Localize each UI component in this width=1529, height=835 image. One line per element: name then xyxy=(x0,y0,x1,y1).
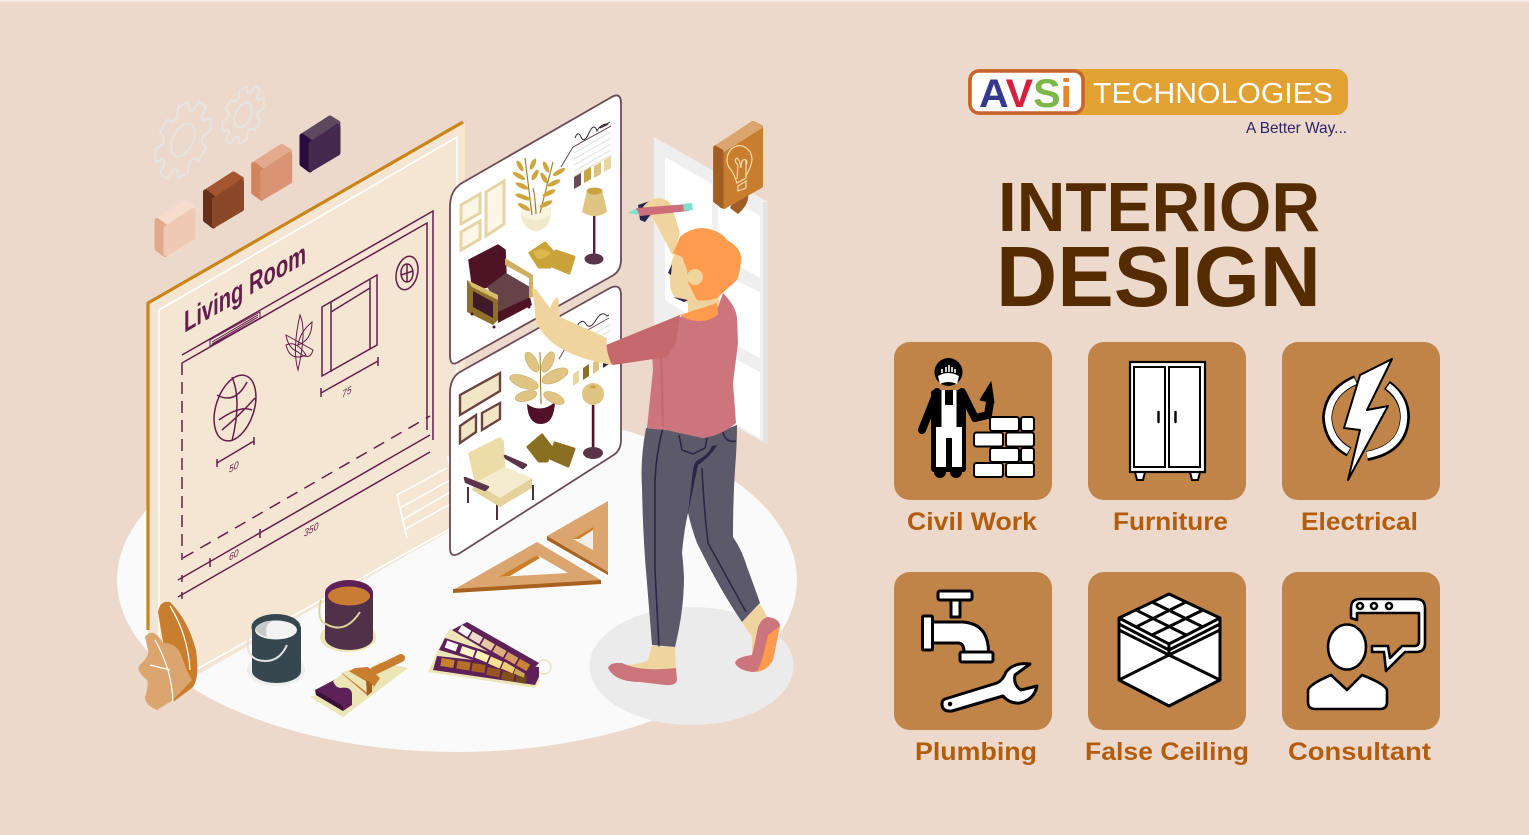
colour chips xyxy=(573,352,609,386)
label: Consultant xyxy=(1288,738,1432,766)
pointing arm xyxy=(532,288,612,365)
icon: ceiling grid cube xyxy=(1119,594,1220,706)
blueprint board: 350 xyxy=(304,520,319,540)
decorative leaves xyxy=(139,602,197,710)
potted plant xyxy=(512,158,566,231)
card: furniture xyxy=(1088,342,1246,536)
icon: lightning bolt xyxy=(1327,359,1405,480)
blueprint board xyxy=(148,122,465,700)
floor ellipse xyxy=(117,408,797,752)
globe lamp xyxy=(582,383,604,459)
paintbrush xyxy=(310,658,408,717)
paint can brown xyxy=(319,580,376,652)
pen hand and arm xyxy=(628,198,693,256)
label: Electrical xyxy=(1301,508,1418,536)
armchair xyxy=(467,245,533,328)
blueprint board: 60 xyxy=(229,547,239,564)
logo: TECHNOLOGIES xyxy=(1093,78,1333,110)
panel: moodboard bottom xyxy=(450,287,621,555)
set squares xyxy=(453,501,608,593)
icon: light bulb sign xyxy=(715,123,761,214)
icon: consultant with speech bubble xyxy=(1308,599,1425,709)
paint can grey xyxy=(247,614,305,686)
title: DESIGN xyxy=(996,230,1321,325)
shirt xyxy=(647,293,738,438)
wall frames xyxy=(461,181,504,250)
cushions xyxy=(530,243,574,273)
title xyxy=(996,168,1321,325)
card: plumbing xyxy=(894,572,1052,766)
panel: moodboard top xyxy=(450,95,621,364)
wall frames dark xyxy=(460,373,500,443)
person shadow xyxy=(590,607,794,725)
title: INTERIOR xyxy=(998,168,1320,246)
logo: A Better Way... xyxy=(1246,120,1347,137)
board title: Living Room xyxy=(184,236,306,340)
head xyxy=(668,228,741,322)
label: Furniture xyxy=(1113,508,1228,536)
card: electrical xyxy=(1282,342,1440,536)
logo: AVSi xyxy=(979,72,1072,116)
icon: worker and bricks xyxy=(922,358,1034,478)
label: Civil Work xyxy=(907,508,1037,536)
person xyxy=(532,198,780,685)
collar xyxy=(680,303,718,321)
window xyxy=(654,137,768,445)
icon: wardrobe xyxy=(1130,362,1205,480)
logo xyxy=(968,69,1348,137)
signature and notes xyxy=(559,314,611,359)
colour chips xyxy=(574,156,611,189)
label: Plumbing xyxy=(915,738,1037,766)
signature and notes xyxy=(561,122,611,176)
card: false ceiling xyxy=(1085,572,1249,766)
sleeve xyxy=(606,315,680,365)
blueprint board: 50 xyxy=(229,459,239,476)
plant with broad leaves xyxy=(508,350,570,424)
icon: gears xyxy=(155,77,264,191)
icon: tap and wrench xyxy=(922,591,1037,711)
card: consultant xyxy=(1282,572,1440,766)
card: civil work xyxy=(894,342,1052,536)
floor lamp xyxy=(582,188,607,264)
colour swatches xyxy=(157,118,338,254)
colour fan deck xyxy=(428,622,551,688)
cream chair xyxy=(465,437,533,520)
feet and shoes xyxy=(608,604,780,685)
label: False Ceiling xyxy=(1085,738,1249,766)
legs xyxy=(642,425,760,647)
cushions olive xyxy=(528,435,574,466)
blueprint board: 75 xyxy=(342,384,352,401)
